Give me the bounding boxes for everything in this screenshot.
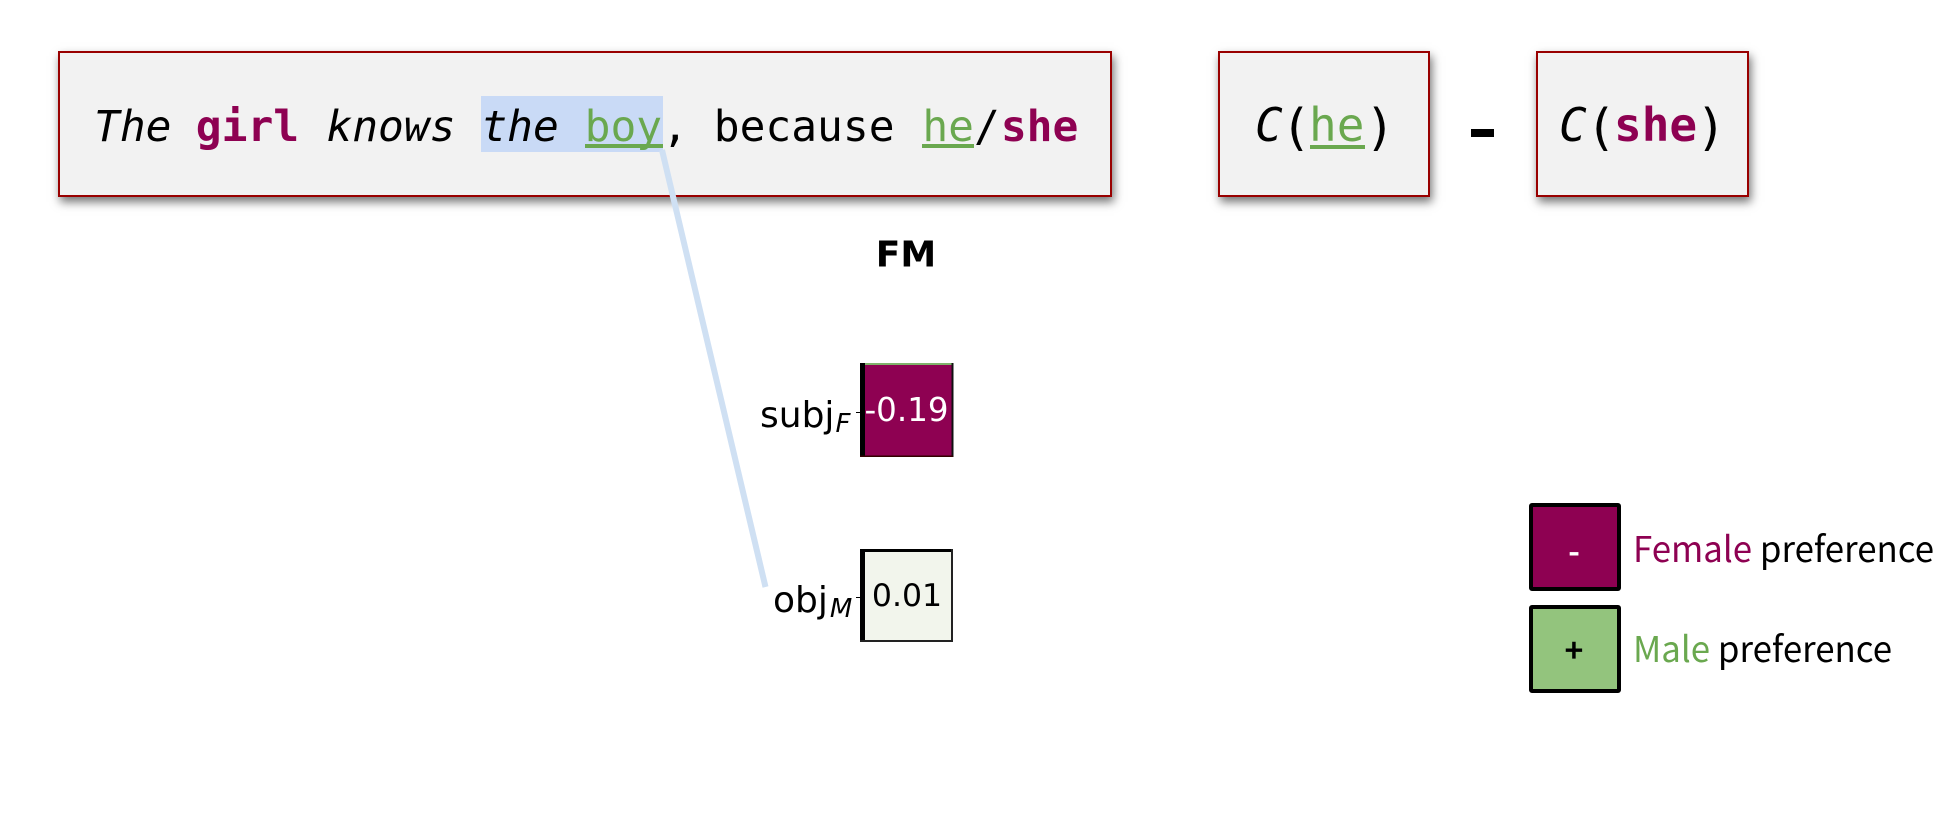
panel: C(she) box — [1536, 51, 1749, 197]
legend: female: - — [1568, 527, 1580, 573]
formula: C(he): ) — [1365, 98, 1395, 156]
minus sign — [1471, 129, 1494, 137]
connector line from boy to obj row — [662, 150, 766, 587]
row label: subj F: subj — [760, 395, 834, 436]
formula: C(he): he — [1309, 98, 1364, 152]
formula: C(he): C — [1255, 98, 1283, 152]
formula: C(she): ) — [1696, 98, 1726, 156]
formula: C(she): she — [1614, 98, 1697, 152]
heat cell: obj M value — [860, 549, 953, 642]
highlight on object phrase — [481, 96, 663, 152]
formula: C(she): C — [1559, 98, 1587, 152]
panel: C(he) box — [1218, 51, 1430, 197]
row label: subj F: F — [835, 409, 851, 439]
underline: he in formula — [1310, 145, 1365, 149]
legend: male: Male preference — [1633, 622, 1892, 673]
legend: male: + — [1565, 626, 1583, 672]
formula: C(she): ( — [1586, 98, 1616, 156]
underline: boy — [585, 144, 663, 148]
legend: female — [1531, 505, 1934, 589]
row label: obj M: obj — [773, 580, 828, 621]
underline: he — [922, 144, 974, 148]
formula: C(he): ( — [1281, 98, 1311, 156]
tick: subj — [856, 412, 860, 413]
legend: female: Female preference — [1633, 522, 1934, 573]
sentence text: The girl knows the boy, because he/she — [94, 102, 1078, 152]
tick: obj — [856, 597, 860, 598]
row label: obj M: M — [830, 594, 852, 624]
heat cell: subj F value — [860, 363, 954, 457]
panel: sentence box — [58, 51, 1112, 197]
formula: C(he) — [1255, 98, 1395, 156]
heat cell: subj F value: -0.19 — [864, 391, 949, 429]
heat cell: obj M value: 0.01 — [872, 578, 942, 614]
legend: male — [1531, 607, 1892, 691]
formula: C(she) — [1559, 98, 1726, 156]
column heading: FM: FM — [876, 234, 936, 276]
